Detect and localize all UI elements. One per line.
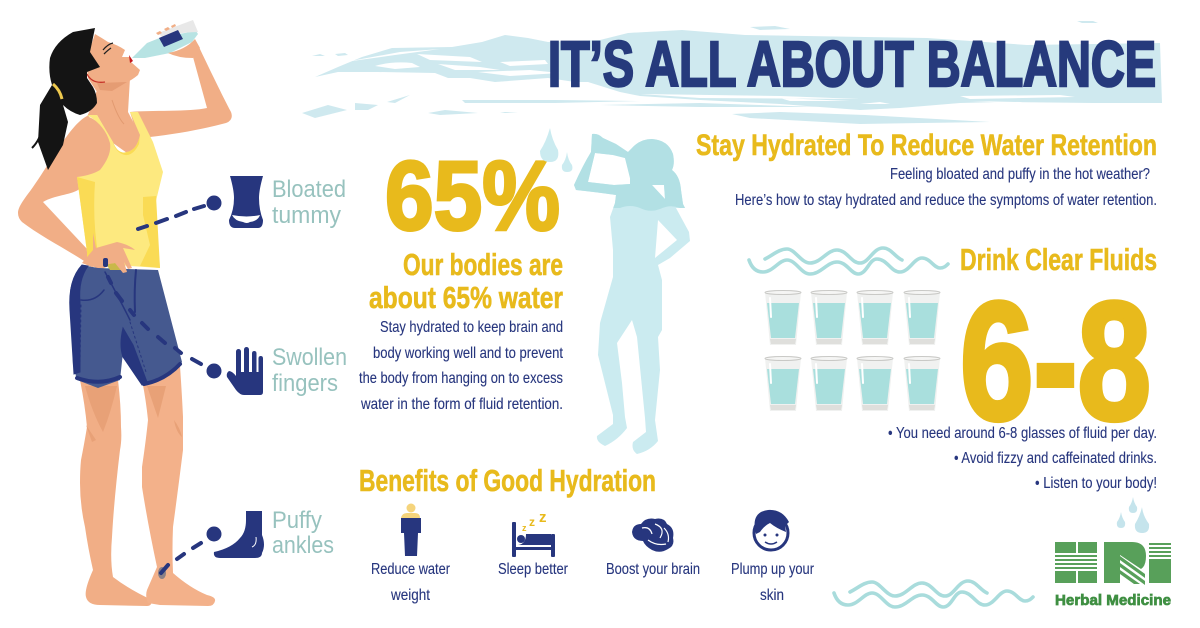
lips bbox=[129, 55, 133, 63]
intro text bbox=[735, 166, 1157, 209]
label: Plump up your bbox=[731, 561, 815, 578]
callout: bloated tummy bbox=[138, 176, 346, 229]
raised arm bbox=[130, 45, 232, 150]
shorts seams and folds bbox=[70, 265, 180, 385]
silhouette body bbox=[574, 134, 690, 454]
wave decoration bottom bbox=[834, 581, 1033, 607]
benefit: plump up your skin: skin bbox=[760, 587, 784, 604]
water drops bbox=[540, 128, 572, 172]
label: Puffy bbox=[272, 507, 322, 534]
neck and chest bbox=[87, 78, 140, 153]
bottle label bbox=[159, 30, 183, 47]
pointer bbox=[138, 206, 204, 229]
logo H bbox=[1055, 542, 1097, 583]
bullet list: • Avoid fizzy and caffeinated drinks. bbox=[954, 450, 1157, 467]
bottle cap end bbox=[158, 20, 198, 37]
leg shading bbox=[85, 386, 182, 442]
shorts bbox=[70, 265, 182, 388]
label: Boost your brain bbox=[606, 561, 700, 578]
bullet list: • Listen to your body! bbox=[1035, 475, 1157, 492]
eye bbox=[103, 43, 113, 54]
icon: underwear bbox=[232, 215, 260, 223]
neck shadow bbox=[97, 82, 127, 91]
paragraph: stay hydrated: the body from hanging on to excess bbox=[359, 370, 563, 387]
label: Bloated bbox=[272, 176, 346, 203]
icon: person bbox=[401, 504, 421, 556]
icon: hand bbox=[227, 347, 263, 395]
hair bbox=[38, 28, 100, 170]
icon: zzz: z bbox=[522, 523, 527, 533]
callout: swollen fingers bbox=[206, 344, 347, 397]
silhouette of woman drinking bbox=[574, 134, 690, 454]
silhouette water level bbox=[574, 134, 685, 211]
ear bbox=[87, 74, 105, 82]
hair tie bbox=[53, 84, 62, 99]
ankle mark bbox=[158, 567, 166, 579]
bottle water bbox=[132, 31, 198, 58]
label: Reduce water bbox=[371, 561, 451, 578]
pointer bbox=[161, 543, 201, 573]
line 1: Our bodies are bbox=[403, 247, 563, 282]
label line 2: ankles bbox=[272, 532, 334, 559]
logo wordmark: Herbal Medicine bbox=[1055, 592, 1171, 609]
line 2: about 65% water bbox=[369, 280, 563, 315]
drops above logo bbox=[1117, 497, 1149, 533]
icon: torso bbox=[229, 176, 263, 228]
label: Swollen bbox=[272, 344, 347, 371]
logo: HRI Herbal Medicine bbox=[1055, 542, 1171, 609]
eight glasses of water bbox=[765, 290, 940, 411]
benefit: plump up your skin bbox=[731, 510, 815, 604]
paragraph: stay hydrated: body working well and to prevent bbox=[373, 345, 563, 362]
tank shading bbox=[77, 135, 160, 268]
benefit: reduce water weight: weight bbox=[390, 587, 430, 604]
foot highlight bbox=[252, 537, 256, 547]
benefit: boost your brain bbox=[606, 519, 700, 578]
label: Sleep better bbox=[498, 561, 569, 578]
head bbox=[86, 34, 140, 92]
back arm bbox=[18, 116, 115, 270]
label line 2: fingers bbox=[272, 370, 338, 397]
wave decoration bbox=[749, 248, 948, 274]
bullet list bbox=[888, 425, 1157, 492]
dot bbox=[206, 526, 222, 542]
callout: puffy ankles bbox=[161, 507, 334, 573]
logo I bbox=[1149, 543, 1171, 583]
icon: zzz: z bbox=[539, 509, 546, 526]
tank top bbox=[77, 112, 163, 268]
logo R bbox=[1104, 542, 1146, 585]
woman drinking illustration bbox=[18, 20, 232, 606]
hair strand bbox=[32, 122, 43, 148]
hand holding bottle bbox=[168, 39, 200, 58]
benefit: reduce water weight bbox=[371, 504, 451, 604]
belt sliver bbox=[106, 262, 124, 270]
paragraph: stay hydrated: Stay hydrated to keep brain and bbox=[380, 319, 563, 336]
paragraph: stay hydrated bbox=[359, 319, 563, 413]
hand on hip bbox=[82, 233, 135, 273]
right leg bbox=[142, 366, 215, 606]
big stat 65%: 65% bbox=[385, 140, 560, 250]
bottle bbox=[132, 20, 198, 58]
heading: our bodies bbox=[369, 247, 563, 315]
collarbone shadow bbox=[112, 100, 124, 124]
icon: zzz bbox=[522, 509, 546, 533]
dot bbox=[206, 196, 222, 210]
icon: foot bbox=[214, 511, 264, 558]
big stat 6-8: 6-8 bbox=[960, 267, 1151, 455]
left leg bbox=[80, 380, 152, 606]
fingers on bottle bbox=[156, 24, 176, 35]
paragraph: stay hydrated: water in the form of fluid retention. bbox=[360, 396, 563, 413]
icon: bed bbox=[512, 522, 555, 557]
icon: face bbox=[754, 510, 789, 550]
dashed pointer to swollen fingers bbox=[108, 277, 201, 364]
benefit: sleep better bbox=[498, 509, 569, 578]
icon: zzz: z bbox=[529, 515, 535, 529]
ring bbox=[103, 258, 108, 267]
heading: benefits: Benefits of Good Hydration bbox=[359, 463, 656, 498]
dot bbox=[206, 364, 222, 378]
brush stroke behind title bbox=[302, 21, 1162, 124]
label line 2: tummy bbox=[272, 202, 341, 229]
icon: brain bbox=[632, 519, 673, 552]
